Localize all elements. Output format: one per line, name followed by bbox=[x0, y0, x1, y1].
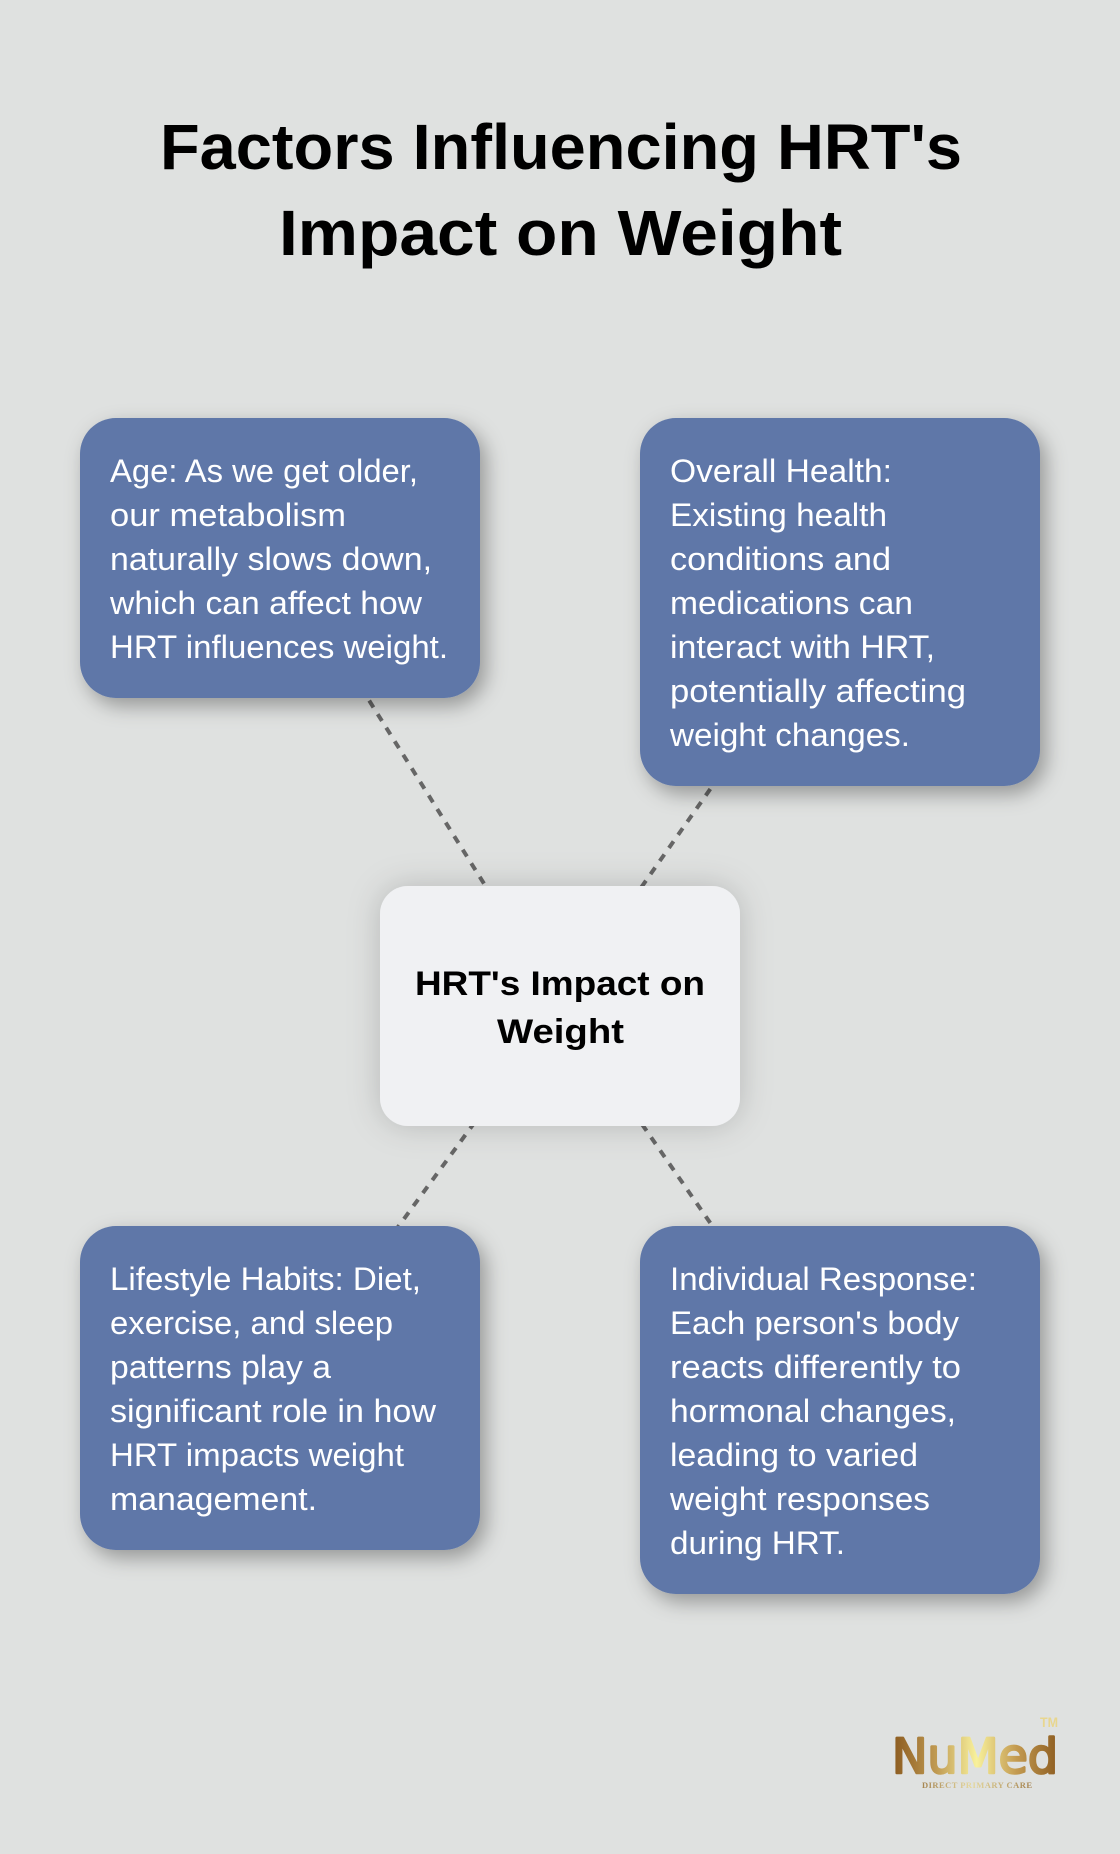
panel: lifestyle habits: Lifestyle Habits: Diet, bbox=[110, 1261, 421, 1297]
panel: individual response: weight responses bbox=[669, 1481, 930, 1517]
title: Impact on Weight bbox=[279, 197, 842, 269]
panel: individual response: leading to varied bbox=[670, 1437, 918, 1473]
panel: center topic: Weight bbox=[497, 1013, 624, 1051]
title: Factors Influencing HRT's bbox=[160, 111, 962, 183]
panel: age: our metabolism bbox=[110, 497, 346, 533]
panel: lifestyle habits: significant role in how bbox=[110, 1393, 437, 1429]
panel: overall health: Overall Health: bbox=[670, 453, 892, 489]
panel: individual response: hormonal changes, bbox=[670, 1393, 956, 1429]
panel: lifestyle habits: patterns play a bbox=[110, 1349, 331, 1385]
panel: individual response: Individual Response: bbox=[670, 1261, 977, 1297]
panel: overall health: Existing health bbox=[670, 497, 887, 533]
panel: lifestyle habits: HRT impacts weight bbox=[110, 1437, 404, 1473]
panel: overall health: potentially affecting bbox=[670, 673, 966, 709]
title bbox=[160, 111, 962, 269]
connector: individual response to center bbox=[642, 1124, 711, 1224]
logo: NuMed: DIRECT PRIMARY CARE bbox=[922, 1780, 1032, 1790]
panel: overall health bbox=[640, 418, 1040, 786]
panel: individual response: during HRT. bbox=[670, 1525, 845, 1561]
logo: NuMed: NuMed bbox=[892, 1729, 1058, 1785]
panel: lifestyle habits: exercise, and sleep bbox=[110, 1305, 393, 1341]
logo: NuMed: TM bbox=[1040, 1714, 1058, 1730]
panel: lifestyle habits: management. bbox=[110, 1481, 317, 1517]
panel: center topic: HRT's Impact on bbox=[415, 965, 705, 1003]
panel: individual response bbox=[640, 1226, 1040, 1594]
panel: age bbox=[80, 418, 480, 698]
panel: center topic bbox=[380, 886, 740, 1126]
connector: lifestyle habits to center bbox=[394, 1115, 480, 1232]
panel: individual response: Each person's body bbox=[670, 1305, 959, 1341]
connector: age to center bbox=[369, 701, 488, 890]
panel: age: naturally slows down, bbox=[110, 541, 432, 577]
connector: overall health to center bbox=[638, 789, 710, 892]
panel: individual response: reacts differently to bbox=[670, 1349, 961, 1385]
panel: overall health: conditions and bbox=[670, 541, 891, 577]
panel: overall health: medications can bbox=[670, 585, 913, 621]
panel: overall health: weight changes. bbox=[669, 717, 910, 753]
panel: age: Age: As we get older, bbox=[110, 453, 418, 489]
panel: lifestyle habits bbox=[80, 1226, 480, 1550]
panel: age: which can affect how bbox=[109, 585, 423, 621]
panel: age: HRT influences weight. bbox=[110, 629, 448, 665]
panel: overall health: interact with HRT, bbox=[670, 629, 935, 665]
